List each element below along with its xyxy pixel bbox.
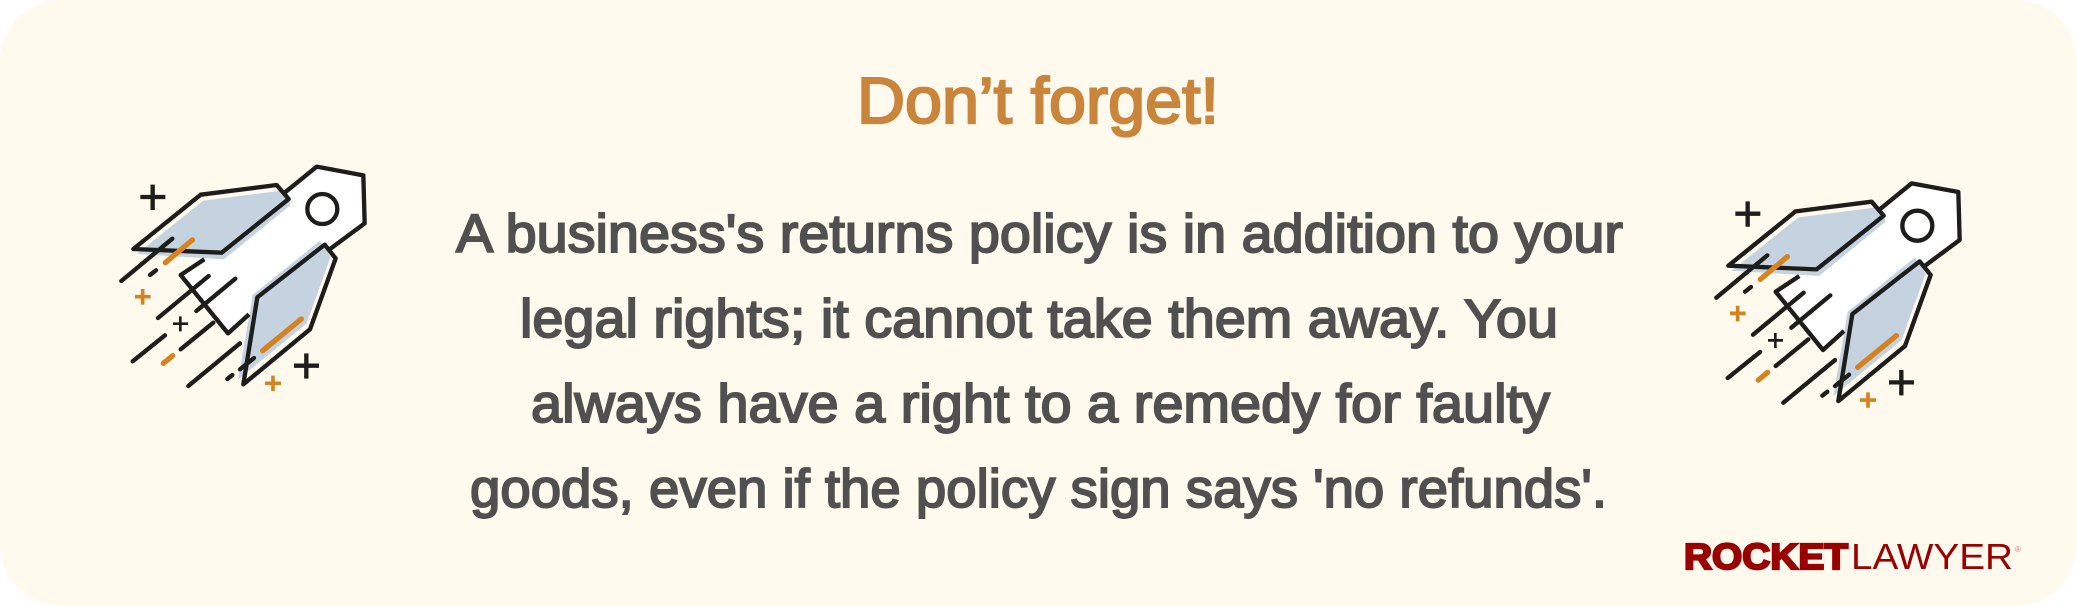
body text: A business's returns policy is in addition to your: [456, 204, 1623, 264]
logo: Rocket Lawyer: ®: [2015, 545, 2021, 554]
logo: Rocket Lawyer: LAWYER: [1851, 536, 2013, 577]
logo: Rocket Lawyer: ROCKET: [1684, 536, 1848, 577]
logo: Rocket Lawyer: [1684, 536, 2021, 577]
icon: right rocket: [1716, 183, 1960, 408]
body text: goods, even if the policy sign says 'no refunds'.: [470, 459, 1607, 519]
icon: left rocket: [121, 167, 365, 391]
title: Don’t forget!: [857, 64, 1219, 137]
body text: legal rights; it cannot take them away. You: [520, 289, 1558, 349]
body text: [456, 204, 1623, 519]
body text: always have a right to a remedy for faulty: [531, 374, 1550, 434]
